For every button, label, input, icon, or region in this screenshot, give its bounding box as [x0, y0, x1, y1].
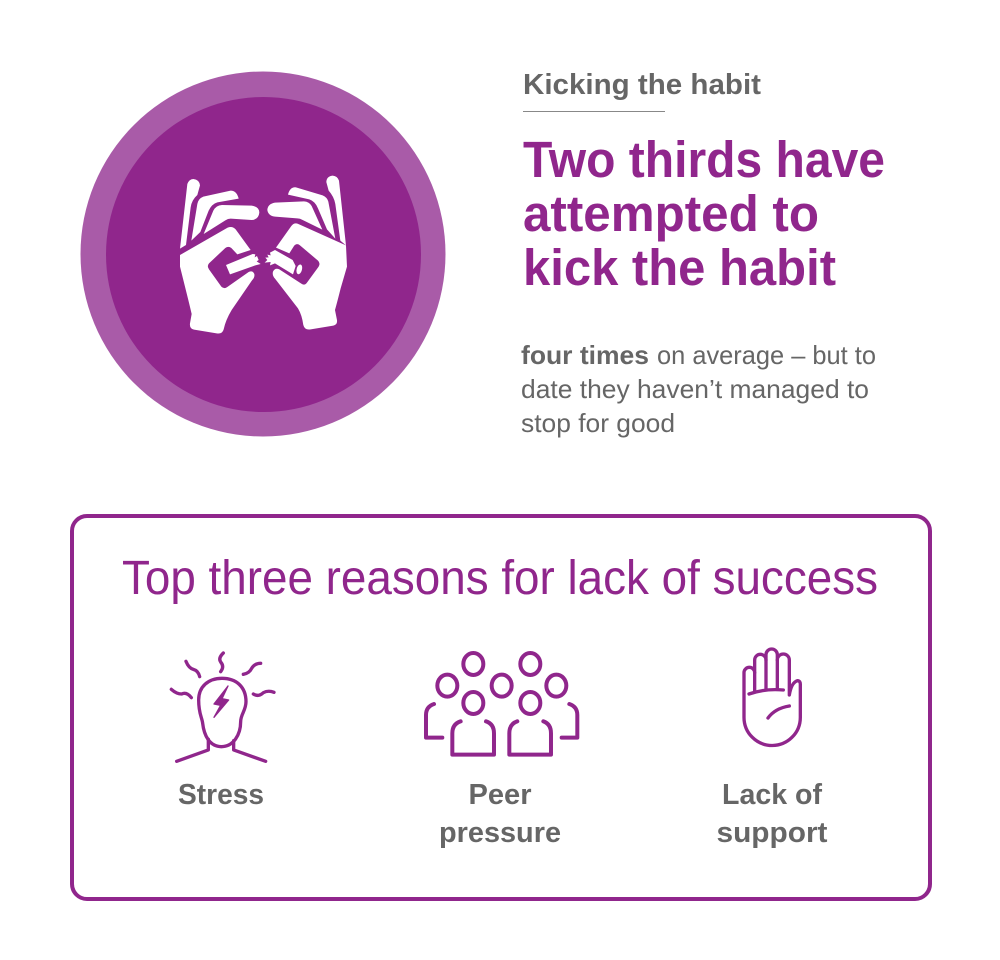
label: Stress: Stress: [178, 779, 264, 811]
panel: purple circle with hands icon: [80, 72, 446, 436]
panel: top three reasons: [72, 516, 930, 899]
label: Lack of support: [716, 779, 828, 849]
heading: attempted to: [523, 185, 819, 242]
label: Peer pressure: [439, 779, 561, 849]
section label: Kicking the habit: Kicking the habit: [523, 69, 761, 101]
label: Peer pressure: Peer: [468, 779, 532, 811]
icon: raised hand: [744, 649, 800, 745]
body text: date they haven’t managed to: [521, 374, 869, 404]
body text: on average – but to: [657, 340, 876, 370]
panel heading: Top three reasons for lack of success: [122, 552, 878, 605]
body text: [521, 340, 876, 438]
icon: hands breaking a cigarette: [180, 176, 347, 333]
icon: group of people: [426, 653, 577, 755]
body text: four times: [521, 340, 649, 370]
label: Peer pressure: pressure: [439, 817, 561, 849]
heading: kick the habit: [523, 239, 836, 296]
label: Lack of support: support: [716, 817, 828, 849]
body text: stop for good: [521, 408, 675, 438]
label: Lack of support: Lack of: [722, 779, 822, 811]
heading: [523, 131, 885, 296]
icon: stressed head: [171, 653, 274, 761]
heading: Two thirds have: [523, 131, 885, 188]
